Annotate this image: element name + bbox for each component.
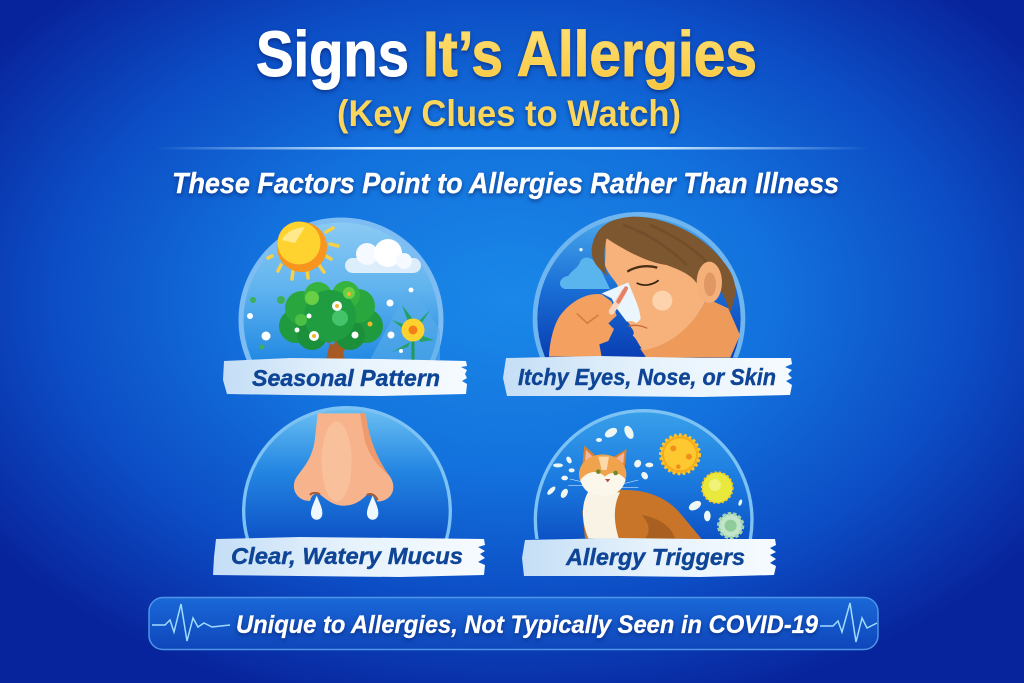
- title: [256, 18, 757, 90]
- cheek: [652, 291, 672, 311]
- subtitle: (Key Clues to Watch): [337, 93, 681, 134]
- cat chest: [583, 492, 620, 539]
- label: itchy eyes: [503, 356, 792, 397]
- person illustration: [532, 212, 746, 358]
- eye: [637, 280, 659, 285]
- nose: [294, 413, 393, 506]
- panel: seasonal pattern: [223, 218, 467, 396]
- icon: left heartbeat: [152, 604, 230, 641]
- icon: flower: [392, 305, 434, 362]
- neck shade: [640, 298, 740, 358]
- label: allergy triggers: Allergy Triggers: [565, 544, 745, 570]
- mouth: [628, 325, 647, 328]
- ear: [697, 262, 722, 303]
- icon: sun: [268, 222, 338, 279]
- label: seasonal pattern: [223, 358, 467, 396]
- panel: itchy eyes, nose, skin: [503, 212, 792, 397]
- subheading: These Factors Point to Allergies Rather Than Illness: [172, 168, 839, 200]
- pollen lime: [702, 472, 733, 503]
- title: Signs: [256, 18, 409, 90]
- pollen green: [719, 514, 743, 538]
- panel: allergy triggers: [522, 409, 776, 577]
- hand: [549, 294, 617, 357]
- face: [605, 238, 705, 350]
- icon: right heartbeat: [820, 603, 877, 642]
- label: allergy triggers: [522, 538, 776, 577]
- label: itchy eyes: Itchy Eyes, Nose, or Skin: [518, 364, 776, 390]
- cat body: [582, 490, 702, 539]
- icon: cloud: [345, 239, 421, 273]
- callout bar: [149, 598, 878, 650]
- title: It’s Allergies: [423, 18, 757, 90]
- pollen yellow: [661, 435, 699, 474]
- tissue: [602, 282, 641, 323]
- icon: tree: [279, 281, 383, 360]
- label: clear watery mucus: [213, 537, 485, 577]
- eyebrow: [627, 266, 657, 272]
- cat head: [579, 454, 626, 484]
- petals: [546, 424, 743, 521]
- hair: [592, 217, 735, 312]
- drops: [311, 496, 322, 520]
- nose illustration: [242, 406, 452, 539]
- label: seasonal pattern: Seasonal Pattern: [252, 365, 440, 391]
- cat and pollen illustration: [534, 409, 754, 539]
- panel: clear watery mucus: [213, 406, 485, 577]
- cat ears: [582, 446, 596, 464]
- cloud: [560, 257, 610, 289]
- label: clear watery mucus: Clear, Watery Mucus: [231, 543, 463, 569]
- seasonal illustration: [238, 218, 444, 360]
- callout text: Unique to Allergies, Not Typically Seen in COVID-19: [236, 611, 818, 639]
